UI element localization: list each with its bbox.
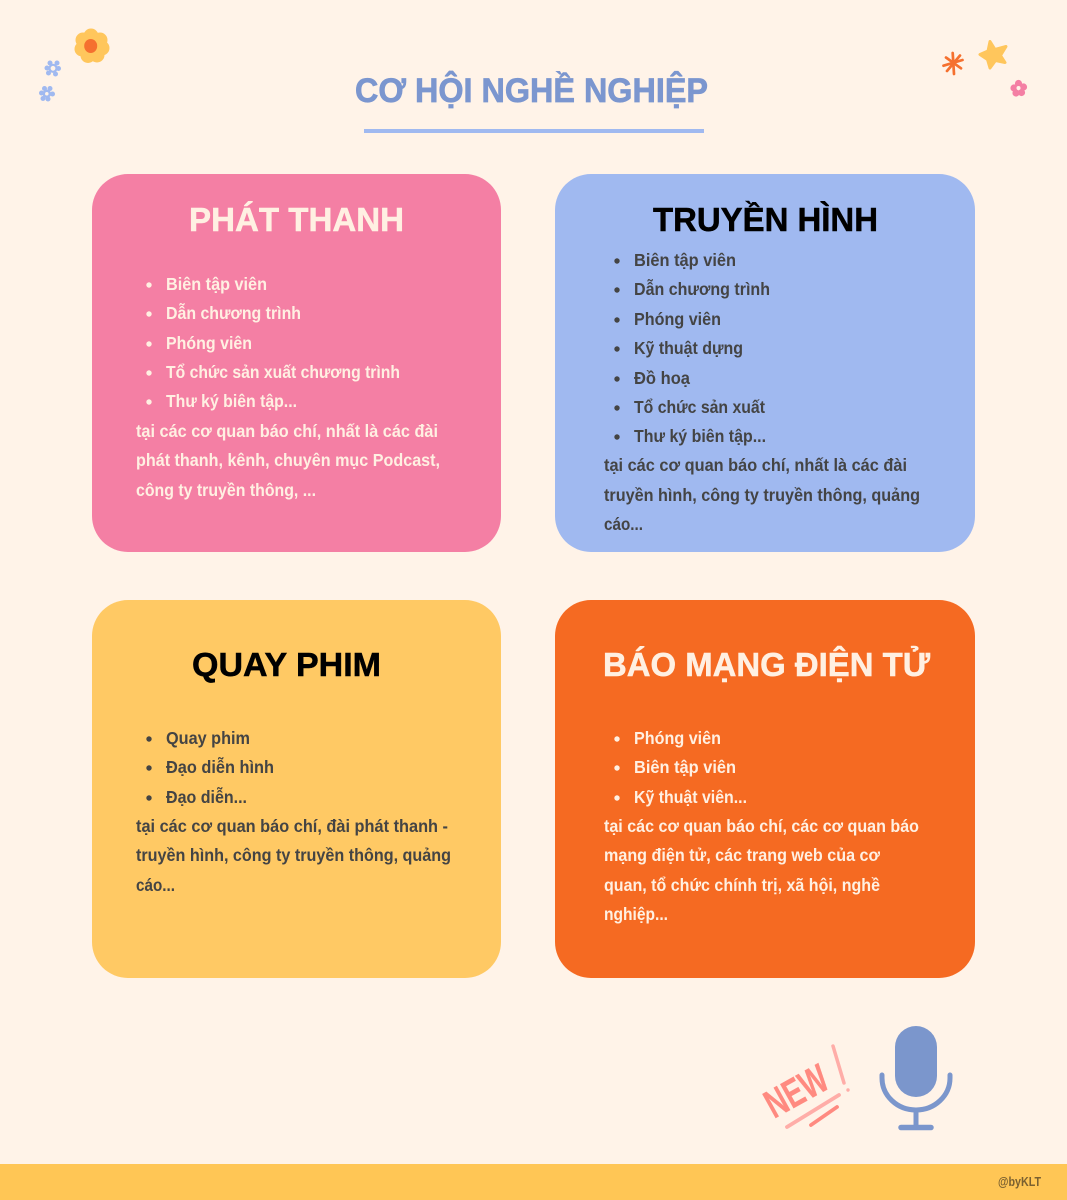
text: truyền hình workplaces bbox=[604, 455, 920, 534]
list: báo mạng jobs: Kỹ thuật viên... bbox=[634, 787, 747, 807]
panel: truyền hình bbox=[555, 174, 975, 552]
list: phát thanh jobs: Dẫn chương trình bbox=[166, 302, 301, 323]
list: truyền hình jobs: Đồ hoạ bbox=[634, 368, 690, 388]
footer credit: @byKLT bbox=[998, 1175, 1041, 1189]
text: báo mạng workplaces: mạng điện tử, các trang web của cơ bbox=[604, 845, 881, 865]
list: quay phim jobs: Đạo diễn... bbox=[166, 786, 247, 807]
icon: yellow star bbox=[980, 42, 1006, 68]
icon: pink flower bbox=[1010, 80, 1027, 97]
list: phát thanh jobs bbox=[146, 274, 400, 411]
icon: blue flower upper bbox=[44, 60, 61, 76]
text: báo mạng workplaces: nghiệp... bbox=[604, 904, 668, 924]
icon: orange flower bbox=[74, 28, 110, 63]
icon: blue flower lower bbox=[39, 86, 55, 102]
footer bar bbox=[0, 1164, 1067, 1200]
text: truyền hình workplaces: tại các cơ quan báo chí, nhất là các đài bbox=[604, 455, 907, 475]
list: truyền hình jobs: Biên tập viên bbox=[634, 250, 736, 270]
sticker: new: NEW bbox=[757, 1056, 836, 1127]
list: phát thanh jobs: Phóng viên bbox=[166, 333, 252, 353]
title: CƠ HỘI NGHỀ NGHIỆP bbox=[355, 71, 708, 110]
list: truyền hình jobs: Dẫn chương trình bbox=[634, 278, 770, 299]
text: báo mạng workplaces bbox=[604, 816, 919, 924]
title underline bbox=[364, 129, 704, 133]
heading: truyền hình: TRUYỀN HÌNH bbox=[653, 201, 878, 239]
panel: quay phim bbox=[92, 600, 501, 978]
text: quay phim workplaces: cáo... bbox=[136, 875, 175, 895]
text: quay phim workplaces: tại các cơ quan báo chí, đài phát thanh - bbox=[136, 816, 448, 836]
text: phát thanh workplaces: tại các cơ quan báo chí, nhất là các đài bbox=[136, 421, 438, 441]
heading: báo mạng điện tử: BÁO MẠNG ĐIỆN TỬ bbox=[603, 646, 930, 684]
list: quay phim jobs: Đạo diễn hình bbox=[166, 756, 274, 777]
list: báo mạng jobs: Phóng viên bbox=[634, 728, 721, 748]
icon: orange asterisk bbox=[944, 53, 962, 74]
heading: quay phim: QUAY PHIM bbox=[192, 647, 381, 684]
text: truyền hình workplaces: truyền hình, công ty truyền thông, quảng bbox=[604, 485, 920, 505]
list: truyền hình jobs: Kỹ thuật dựng bbox=[634, 338, 743, 358]
text: phát thanh workplaces bbox=[136, 421, 440, 500]
text: báo mạng workplaces: tại các cơ quan báo chí, các cơ quan báo bbox=[604, 816, 919, 836]
list: báo mạng jobs: Biên tập viên bbox=[634, 757, 736, 777]
icon: microphone bbox=[882, 1026, 950, 1128]
panel: báo mạng điện tử bbox=[555, 600, 975, 978]
list: truyền hình jobs: Phóng viên bbox=[634, 309, 721, 329]
list: báo mạng jobs bbox=[614, 728, 747, 807]
list: quay phim jobs bbox=[146, 728, 274, 807]
list: truyền hình jobs: Tổ chức sản xuất bbox=[634, 397, 765, 417]
list: phát thanh jobs: Thư ký biên tập... bbox=[166, 391, 297, 411]
list: quay phim jobs: Quay phim bbox=[166, 728, 250, 748]
heading: phát thanh: PHÁT THANH bbox=[189, 201, 404, 239]
list: phát thanh jobs: Biên tập viên bbox=[166, 274, 267, 294]
panel: phát thanh bbox=[92, 174, 501, 552]
text: phát thanh workplaces: công ty truyền thông, ... bbox=[136, 480, 316, 500]
list: phát thanh jobs: Tổ chức sản xuất chương trình bbox=[166, 362, 400, 382]
text: quay phim workplaces: truyền hình, công ty truyền thông, quảng bbox=[136, 845, 451, 865]
list: truyền hình jobs: Thư ký biên tập... bbox=[634, 426, 766, 446]
text: phát thanh workplaces: phát thanh, kênh, chuyên mục Podcast, bbox=[136, 450, 440, 470]
text: quay phim workplaces bbox=[136, 816, 451, 895]
text: truyền hình workplaces: cáo... bbox=[604, 514, 643, 534]
list: truyền hình jobs bbox=[614, 250, 770, 446]
text: báo mạng workplaces: quan, tổ chức chính trị, xã hội, nghề bbox=[604, 875, 880, 895]
